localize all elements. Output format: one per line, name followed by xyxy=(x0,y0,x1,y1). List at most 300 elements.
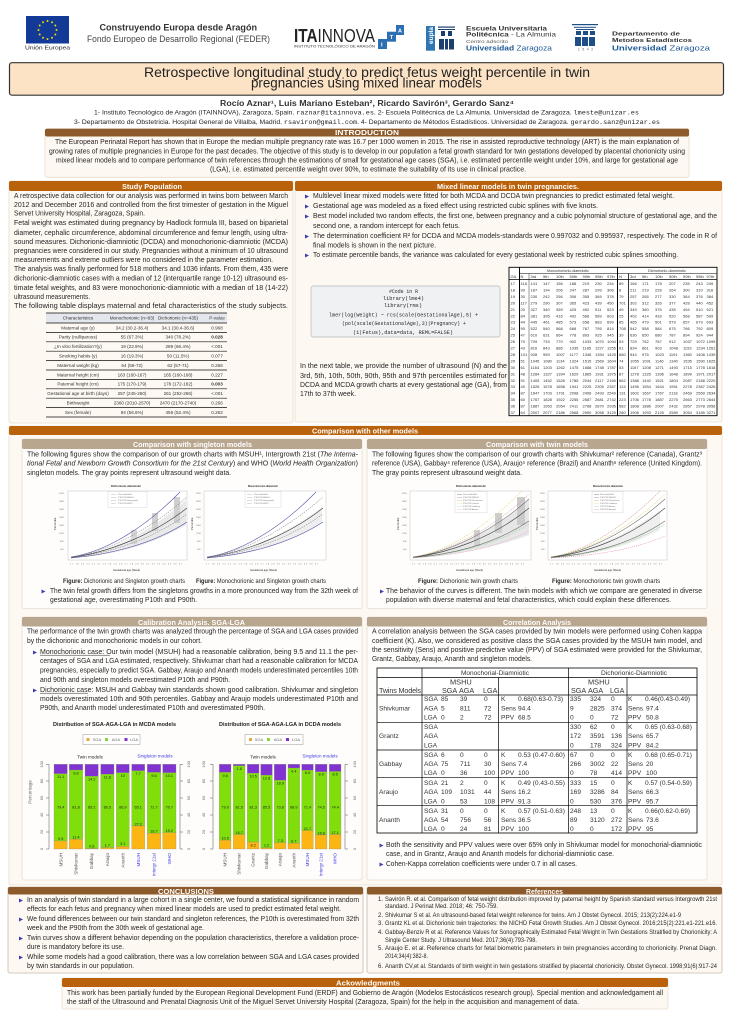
table: maternal and fetal characteristics: Birthweight xyxy=(67,400,90,406)
table: percentiles by gestational age: 24 xyxy=(510,326,516,331)
table: percentiles by gestational age: 26 xyxy=(510,339,516,344)
bar chart: SGA-AGA-LGA in DCDA models: Twin models xyxy=(250,754,276,760)
table: percentiles by gestational age: 1658 xyxy=(556,384,566,389)
table: kappa correlation: 53 xyxy=(460,798,468,806)
table: percentiles by gestational age: 20 xyxy=(520,307,526,312)
table: kappa correlation: 30 xyxy=(484,761,492,768)
table: kappa correlation: LGA xyxy=(424,826,438,833)
bar chart: SGA-AGA-LGA in DCDA models: 8.2 xyxy=(251,844,256,848)
table: percentiles by gestational age: 1791 xyxy=(556,391,566,396)
table: percentiles by gestational age: 279 xyxy=(530,300,538,305)
table: kappa correlation: 0 xyxy=(441,798,445,806)
table: percentiles by gestational age: 792 xyxy=(696,326,703,331)
table: percentiles by gestational age: 39 xyxy=(619,333,624,338)
panel: correlation analysis: the sensitivity (Sens) and positive predictive value (PPV) of SGA estimated were provided for the Shivkumar, xyxy=(372,645,702,654)
bar chart: SGA-AGA-LGA in DCDA models: 0 xyxy=(201,847,206,850)
bar chart: SGA-AGA-LGA in DCDA models: 74.4 xyxy=(332,806,339,810)
bar chart: SGA-AGA-LGA in DCDA models: 10.5 xyxy=(222,836,229,840)
table: percentiles by gestational age: 5th xyxy=(642,274,648,279)
table: percentiles by gestational age: 944 xyxy=(630,352,637,357)
table: percentiles by gestational age: 2168 xyxy=(696,378,706,383)
table: kappa correlation: Sens xyxy=(628,789,644,796)
table: kappa correlation: 100 xyxy=(484,770,495,777)
table: percentiles by gestational age: 650 xyxy=(642,333,649,338)
table: percentiles by gestational age: 510 xyxy=(696,307,703,312)
bar chart: SGA-AGA-LGA in DCDA models: Distribution of SGA-AGA-LGA in DCDA models xyxy=(219,722,341,728)
panel: introduction xyxy=(45,128,689,177)
chart: monochorionic and singleton growth: Monochorionic-diamniotic xyxy=(248,484,278,488)
table: kappa correlation: 0 xyxy=(484,808,488,815)
table: kappa correlation: PPV xyxy=(501,714,515,722)
chart: dichorionic twin growth: P10-P90 Araujo xyxy=(463,508,479,511)
panel: comparison with twin models: The gray points represent ultrasound weight data. xyxy=(372,468,522,477)
table: percentiles by gestational age: 2426 xyxy=(706,384,716,389)
table: kappa correlation: 0 xyxy=(460,752,464,759)
table: percentiles by gestational age: 1388 xyxy=(630,378,640,383)
chart: monochorionic and singleton growth: 400 xyxy=(197,549,201,551)
table: percentiles by gestational age: 166 xyxy=(630,281,637,286)
table: percentiles by gestational age: 2357 xyxy=(607,384,617,389)
chart: monochorionic and singleton growth: 800 xyxy=(197,541,201,543)
table: percentiles by gestational age: 1055 xyxy=(630,358,640,363)
panel: calibration analysis: Monochorionic case: Our twin model (MSUH) had a reasonable calibration, being 9.5 and 11.1 the per- xyxy=(40,647,359,656)
bar chart: SGA-AGA-LGA in MCDA models: Gabbay xyxy=(89,852,94,869)
table: kappa correlation: 0 xyxy=(611,724,615,731)
table: kappa correlation xyxy=(377,668,697,833)
table: percentiles by gestational age: 27 xyxy=(510,346,516,350)
table: percentiles by gestational age: 171 xyxy=(642,281,649,286)
panel: calibration analysis: by the dichorionic and monochorionic models in our cohort. xyxy=(27,636,202,645)
table: percentiles by gestational age: 21 xyxy=(510,307,516,312)
table: percentiles by gestational age: 1818 xyxy=(706,365,716,370)
panel: study population: measurements and extreme outliers were no considered in the parameter estimation. xyxy=(14,255,273,264)
table: percentiles by gestational age: 242 xyxy=(543,294,550,299)
table: percentiles by gestational age: 886 xyxy=(556,346,563,350)
bar chart: SGA-AGA-LGA in DCDA models: 81.3 xyxy=(250,806,257,810)
table: kappa correlation: Sens xyxy=(501,761,517,768)
bar chart: SGA-AGA-LGA in MCDA models: 81.8 xyxy=(72,806,80,810)
table: percentiles by gestational age: 1234 xyxy=(696,346,706,350)
panel: study population: pregnancies were considered in our study. Pregnancies without a minimum of 10 ultrasound xyxy=(14,246,288,255)
table: percentiles by gestational age: 1647 xyxy=(530,391,540,396)
table: percentiles by gestational age: 733 xyxy=(543,339,550,344)
table: percentiles by gestational age: 87 xyxy=(520,391,526,396)
chart: dichorionic and singleton growth: P10-P90 MSUH xyxy=(118,497,134,499)
table: maternal and fetal characteristics: Maternal height (cm) xyxy=(57,372,100,377)
table: percentiles by gestational age: 542 xyxy=(630,326,637,331)
table: percentiles by gestational age: 843 xyxy=(543,346,550,350)
chart: monochorionic twin growth: 3200 xyxy=(540,493,546,495)
table: percentiles by gestational age: 1033 xyxy=(582,339,592,344)
table: kappa correlation: PPV xyxy=(628,826,642,833)
table: maternal and fetal characteristics xyxy=(46,313,227,417)
table: kappa correlation: 109 xyxy=(441,789,452,796)
chart: dichorionic and singleton growth: P10-P90 Intergrowth xyxy=(118,499,139,502)
table: kappa correlation: 0 xyxy=(441,826,445,833)
bar chart: SGA-AGA-LGA in MCDA models: MSUH xyxy=(58,853,64,867)
table: kappa correlation: 44 xyxy=(484,789,492,796)
table: percentiles by gestational age: 310 xyxy=(696,287,703,292)
chart: dichorionic and singleton growth: P10-P90 WHO xyxy=(118,503,133,505)
table: percentiles by gestational age: 445 xyxy=(530,320,538,325)
table: percentiles by gestational age: 32 xyxy=(510,378,516,383)
table: percentiles by gestational age: 2255 xyxy=(570,397,579,402)
table: percentiles by gestational age: 701 xyxy=(619,300,626,305)
bar chart: SGA-AGA-LGA in MCDA models: 71.7 xyxy=(150,806,158,810)
panel: mixed linear models: Gestational age was modeled as a fixed effect using restricted cubic splines with five knots. xyxy=(313,201,598,210)
table: maternal and fetal characteristics: 2360 (2010-2570) xyxy=(114,400,151,406)
panel: comparison with singleton models: singleton models. The gray points represent ultrasound weight data. xyxy=(27,468,231,477)
panel: study population: dichorionic-diamniotic cases with a median of 12 (interquartile range 10-12) ultrasound es- xyxy=(14,274,288,282)
table: kappa correlation: 0.68 (0.65-0.71) xyxy=(645,752,692,759)
table: maternal and fetal characteristics: Smoking habits (y) xyxy=(59,354,97,358)
table: percentiles by gestational age: 147 xyxy=(543,281,550,286)
table: percentiles by gestational age: 53 xyxy=(619,339,624,344)
bullet: twin finding: population with diverse maternal and fetal characteristics, which could explain these differences. xyxy=(386,595,671,604)
table: percentiles by gestational age: 249 xyxy=(706,281,714,286)
bar chart: SGA-AGA-LGA in MCDA models: 20 xyxy=(186,829,191,834)
chart: monochorionic and singleton growth: 3200 xyxy=(196,493,202,495)
table: kappa correlation: 13 xyxy=(590,808,598,815)
heading: FEDER funding xyxy=(87,22,270,44)
table: kappa correlation: 2 xyxy=(460,714,464,722)
table: percentiles by gestational age: 230 xyxy=(595,281,602,286)
table: percentiles by gestational age: 579 xyxy=(669,320,676,325)
table: kappa correlation: Sens xyxy=(628,817,644,824)
table: percentiles by gestational age: 60 xyxy=(520,397,526,402)
logo: EUPLA: eupla xyxy=(428,27,435,44)
table: percentiles by gestational age: 3rd xyxy=(630,274,636,279)
bar chart: SGA-AGA-LGA in DCDA models: 16.7 xyxy=(236,831,243,835)
chart: monochorionic and singleton growth: 17 18 19 20 21 22 23 24 25 26 27 28 29 30 31 32 33 34 35 36 37 xyxy=(206,564,319,566)
table: kappa correlation: 97.4 xyxy=(646,706,659,712)
table: percentiles by gestational age: 3185 xyxy=(696,410,706,415)
table: maternal and fetal characteristics: 0.028 xyxy=(211,335,223,340)
table: percentiles by gestational age: 264 xyxy=(669,287,676,292)
table: percentiles by gestational age: 944 xyxy=(706,333,714,338)
table: percentiles by gestational age: 2087 xyxy=(683,378,693,383)
table: kappa correlation: Shivkumar xyxy=(379,706,411,712)
table: kappa correlation: 16.2 xyxy=(518,789,531,796)
table: percentiles by gestational age: 2432 xyxy=(669,404,679,409)
table: percentiles by gestational age: 679 xyxy=(696,320,703,325)
table: percentiles by gestational age: 256 xyxy=(556,294,563,299)
table: percentiles by gestational age: 1284 xyxy=(530,371,540,376)
bar chart: SGA-AGA-LGA in DCDA models: 73.8 xyxy=(277,806,284,810)
bar chart: SGA-AGA-LGA in MCDA models: 65.1 xyxy=(135,806,142,810)
table: kappa correlation: 81 xyxy=(484,826,492,833)
table: kappa correlation: 169 xyxy=(570,789,581,796)
table: percentiles by gestational age: 1134 xyxy=(556,358,565,363)
chart: monochorionic and singleton growth: 1600 xyxy=(196,525,202,527)
bar chart: SGA-AGA-LGA in DCDA models: Grantz xyxy=(251,852,256,867)
table: percentiles by gestational age: 17 xyxy=(510,281,516,286)
table: percentiles by gestational age: 37 xyxy=(510,410,516,415)
table: percentiles by gestational age: 219 xyxy=(582,281,590,286)
panel: conclusions: While some models had a good calibration, there was a low correlation between SGA and LGA cases provided xyxy=(27,952,359,961)
table: percentiles by gestational age: 36 xyxy=(510,404,516,409)
table: maternal and fetal characteristics: 34.1 (30.4-36.6) xyxy=(162,325,195,330)
logo: Departamento de Métodos Estadísticos: Universidad Zaragoza xyxy=(612,44,711,52)
table: kappa correlation: PPV xyxy=(501,770,515,777)
bar chart: SGA-AGA-LGA in DCDA models: 12.8 xyxy=(263,776,270,780)
table: kappa correlation: Twins Models xyxy=(379,686,421,695)
table: percentiles by gestational age: 1629 xyxy=(570,371,579,376)
logo: Departamento de Métodos Estadísticos: Metodos Estadísticos xyxy=(612,38,692,44)
table: percentiles by gestational age: 1688 xyxy=(582,365,592,370)
table: maternal and fetal characteristics: Parity (nulliparous) xyxy=(59,335,98,340)
table: percentiles by gestational age: 22 xyxy=(510,313,516,318)
table: kappa correlation: LGA xyxy=(424,770,438,777)
table: kappa correlation: 9 xyxy=(570,706,574,712)
bar chart: SGA-AGA-LGA in MCDA models: WHO xyxy=(167,853,172,864)
table: percentiles by gestational age: 43 xyxy=(520,346,526,350)
table: maternal and fetal characteristics: <.001 xyxy=(211,344,223,349)
table: percentiles by gestational age: 1515 xyxy=(582,358,592,363)
authors: Rocío Aznar¹, Luis Mariano Esteban², Ricardo Savirón³, Gerardo Sanz⁴ xyxy=(220,99,514,108)
table: percentiles by gestational age: 90th xyxy=(582,274,590,279)
panel: conclusions: CONCLUSIONS xyxy=(158,887,214,896)
bar chart: SGA-AGA-LGA in DCDA models: 74.5 xyxy=(318,806,325,810)
table: percentiles by gestational age: 1255 xyxy=(607,346,617,350)
table: percentiles by gestational age: 2569 xyxy=(696,391,706,396)
bar chart: SGA-AGA-LGA in DCDA models: 1.2 xyxy=(264,844,269,848)
table: percentiles by gestational age: 312 xyxy=(642,300,649,305)
text: next table description: 17th to 37th week. xyxy=(300,389,356,398)
bar chart: SGA-AGA-LGA in MCDA models: 20 xyxy=(39,829,44,834)
table: maternal and fetal characteristics: 16 (19.3%) xyxy=(121,354,144,358)
table: percentiles by gestational age: 131 xyxy=(619,391,626,396)
bar chart: SGA-AGA-LGA in DCDA models: WHO xyxy=(333,853,338,864)
table: percentiles by gestational age: 376 xyxy=(696,294,703,299)
bar chart: SGA-AGA-LGA in DCDA models: 100 xyxy=(201,760,206,768)
table: percentiles by gestational age: 558 xyxy=(642,326,649,331)
chart: dichorionic twin growth: Percentile xyxy=(396,517,400,530)
logo: ITAINNOVA xyxy=(294,25,404,49)
table: percentiles by gestational age: 49 xyxy=(619,307,624,312)
table: percentiles by gestational age: 2125 xyxy=(655,410,665,415)
table: percentiles by gestational age: 587 xyxy=(696,313,703,318)
chart: dichorionic twin growth: Percentile50th xyxy=(463,493,478,496)
table: percentiles by gestational age: 141 xyxy=(530,281,538,286)
table: percentiles by gestational age: 1648 xyxy=(669,371,679,376)
table: maternal and fetal characteristics: 178 (172-182) xyxy=(164,382,193,387)
table: kappa correlation: 72 xyxy=(484,714,492,722)
table: percentiles by gestational age: 47 xyxy=(520,333,526,338)
bar chart: SGA-AGA-LGA in DCDA models: 8.5 xyxy=(333,772,338,776)
table: percentiles by gestational age: 945 xyxy=(607,333,614,338)
table: percentiles by gestational age: 1604 xyxy=(607,358,617,363)
table: percentiles by gestational age: 228 xyxy=(655,287,662,292)
bar chart: SGA-AGA-LGA in DCDA models: 80 xyxy=(352,778,357,783)
bar chart: SGA-AGA-LGA in MCDA models: 0 xyxy=(186,847,191,850)
table: percentiles by gestational age: 630 xyxy=(630,333,637,338)
table: maternal and fetal characteristics: 55 (67.3%) xyxy=(121,335,144,340)
table: kappa correlation: 50.8 xyxy=(646,714,659,722)
table: percentiles by gestational age: 395 xyxy=(543,313,550,318)
table: kappa correlation: AGA xyxy=(424,706,439,712)
panel: comparison with twin models: reference (USA), Gabbay⁴ reference (USA), Araujo⁵ reference (Brazil) and Ananth⁶ reference (United Kingdom). xyxy=(372,459,702,468)
panel: conclusions: week and the P90th from the 30th week of gestational age. xyxy=(26,923,204,932)
table: percentiles by gestational age: 299 xyxy=(595,287,602,292)
table: percentiles by gestational age: 2275 xyxy=(669,397,679,402)
bar chart: SGA-AGA-LGA in MCDA models: Shivkumar xyxy=(74,853,78,875)
logo: ITAINNOVA: T xyxy=(390,35,394,41)
chart: monochorionic twin growth: 2800 xyxy=(540,501,546,503)
table: percentiles by gestational age: 1804 xyxy=(669,378,679,383)
table: percentiles by gestational age: 97th xyxy=(706,274,714,279)
table: percentiles by gestational age: 25 xyxy=(619,313,624,318)
table: maternal and fetal characteristics: Maternal age (y) xyxy=(61,325,95,330)
table: percentiles by gestational age: 1767 xyxy=(530,397,540,402)
panel: references: standard. J Perinat Med. 2018; 46: 750-759. xyxy=(385,904,498,910)
table: percentiles by gestational age: 3058 xyxy=(595,410,605,415)
table: percentiles by gestational age: 247 xyxy=(570,287,577,292)
table: percentiles by gestational age: 1521 xyxy=(655,378,665,383)
table: maternal and fetal characteristics: P-value xyxy=(209,316,225,320)
table: percentiles by gestational age xyxy=(509,267,717,416)
table: kappa correlation: Sens xyxy=(628,733,644,740)
table: percentiles by gestational age: 1778 xyxy=(642,397,652,402)
table: percentiles by gestational age: 23 xyxy=(510,320,516,325)
logo: ITAINNOVA: A xyxy=(398,28,402,34)
table: maternal and fetal characteristics: 456 (52.4%) xyxy=(165,410,191,415)
table: percentiles by gestational age: 3271 xyxy=(706,410,716,415)
bar chart: SGA-AGA-LGA in MCDA models: 19.2 xyxy=(166,829,173,833)
table: kappa correlation: 0.53 (0.47-0.60) xyxy=(518,752,565,759)
bar chart: SGA-AGA-LGA in DCDA models: 8.9 xyxy=(319,772,324,776)
table: kappa correlation: 172 xyxy=(611,826,622,833)
panel: study population: sound measures. Dichorionic-diamniotic (DCDA) and monochorionic-diamniotic (MCDA) xyxy=(14,237,288,246)
table: percentiles by gestational age: 433 xyxy=(655,313,662,318)
bar chart: SGA-AGA-LGA in MCDA models: AGA xyxy=(112,737,121,742)
table: percentiles by gestational age: 2186 xyxy=(556,410,566,415)
bar chart: SGA-AGA-LGA in MCDA models: Araujo xyxy=(105,853,110,866)
table: percentiles by gestational age: 1048 xyxy=(669,346,679,350)
table: percentiles by gestational age: 523 xyxy=(607,307,614,312)
table: kappa correlation: SGA xyxy=(424,696,439,703)
bar chart: SGA-AGA-LGA in DCDA models: MSUH xyxy=(223,853,228,867)
table: kappa correlation: 22 xyxy=(611,761,619,768)
chart: monochorionic twin growth: Gestational age (Week) xyxy=(594,568,621,572)
table: percentiles by gestational age: 766 xyxy=(683,326,690,331)
panel: introduction: INTRODUCTION xyxy=(335,128,399,137)
table: percentiles by gestational age: 64 xyxy=(520,410,526,415)
table: kappa correlation: 0.66(0.62-0.69) xyxy=(645,808,690,815)
panel: references: 4. xyxy=(378,930,383,936)
table: kappa correlation: 20 xyxy=(646,761,654,768)
table: kappa correlation: 3120 xyxy=(590,817,605,824)
table: percentiles by gestational age: 287 xyxy=(582,287,590,292)
table: percentiles by gestational age: 599 xyxy=(706,313,714,318)
bar chart: SGA-AGA-LGA in DCDA models: 88.9 xyxy=(290,806,297,810)
table: kappa correlation: AGA xyxy=(424,817,439,824)
table: percentiles by gestational age: 492 xyxy=(570,313,577,318)
table: percentiles by gestational age: 355 xyxy=(582,294,590,299)
table: percentiles by gestational age: 603 xyxy=(607,313,614,318)
table: percentiles by gestational age: 582 xyxy=(619,404,626,409)
table: percentiles by gestational age: 1037 xyxy=(683,339,693,344)
table: percentiles by gestational age: 90th xyxy=(683,274,691,279)
chart: dichorionic twin growth: 1600 xyxy=(402,525,408,527)
bar chart: SGA-AGA-LGA in MCDA models: 10 xyxy=(121,774,125,778)
table: percentiles by gestational age: 2220 xyxy=(706,378,716,383)
table: percentiles by gestational age: 87 xyxy=(520,404,526,409)
bar chart: SGA-AGA-LGA in DCDA models: 0 xyxy=(352,847,357,850)
table: percentiles by gestational age: 369 xyxy=(595,294,602,299)
table: percentiles by gestational age: 65 xyxy=(619,320,624,325)
table: percentiles by gestational age: 1931 xyxy=(595,371,605,376)
table: percentiles by gestational age: 277 xyxy=(655,294,662,299)
table: percentiles by gestational age: N xyxy=(619,274,622,279)
table: kappa correlation: LGA xyxy=(424,714,438,722)
table: percentiles by gestational age: 589 xyxy=(595,313,602,318)
chart: dichorionic twin growth: P10-P90 Shivkumar xyxy=(463,499,483,502)
table: percentiles by gestational age: 1271 xyxy=(655,365,665,370)
table: percentiles by gestational age: 234 xyxy=(607,281,614,286)
table: kappa correlation: 68.5 xyxy=(518,714,531,722)
table: kappa correlation: PPV xyxy=(501,798,515,806)
table: percentiles by gestational age: 573 xyxy=(570,320,577,325)
bullet: singleton finding: The twin fetal growth differs from the singletons growths in a more pronounced way from the 32th week of xyxy=(50,586,359,595)
panel: study population: The analysis was finally performed for 518 mothers and 1036 infants. From them, 435 were xyxy=(14,264,288,273)
chart: dichorionic twin growth: 2800 xyxy=(402,501,408,503)
panel: calibration analysis: Calibration Analysis. SGA-LGA xyxy=(138,618,245,627)
table: percentiles by gestational age: 1886 xyxy=(642,404,652,409)
panel: comparison with twin models: Comparison with twin models xyxy=(486,440,588,449)
table: percentiles by gestational age: 664 xyxy=(556,333,563,338)
chart: monochorionic twin growth: P10-P90 MSUH xyxy=(600,497,616,499)
table: percentiles by gestational age: 40 xyxy=(520,384,526,389)
chart: monochorionic and singleton growth: 2800 xyxy=(196,501,202,503)
panel: references: 2. xyxy=(378,913,383,919)
table: percentiles by gestational age: 1493 xyxy=(669,365,679,370)
table: percentiles by gestational age: 95th xyxy=(696,274,704,279)
table: percentiles by gestational age: 1070 xyxy=(595,339,605,344)
table: percentiles by gestational age: 3129 xyxy=(607,410,617,415)
bar chart: SGA-AGA-LGA in MCDA models: MSUH xyxy=(136,853,141,867)
bar chart: SGA-AGA-LGA in DCDA models: 100 xyxy=(352,760,357,768)
chart: monochorionic twin growth: P10-P90 Shivkumar xyxy=(600,499,620,502)
bar chart: SGA-AGA-LGA in MCDA models: LGA xyxy=(130,737,138,742)
bar chart: SGA-AGA-LGA in MCDA models xyxy=(28,722,191,876)
table: percentiles by gestational age: 3056 xyxy=(706,404,716,409)
table: maternal and fetal characteristics: Maternal weight (kg) xyxy=(57,363,99,368)
table: kappa correlation: 78 xyxy=(590,770,598,777)
chart: monochorionic twin growth: Percentile50th xyxy=(600,493,615,496)
bar chart: SGA-AGA-LGA in MCDA models: Ananth xyxy=(120,853,126,868)
bar chart: SGA-AGA-LGA in DCDA models: 40 xyxy=(201,812,206,817)
bar chart: SGA-AGA-LGA in MCDA models: Percentage xyxy=(28,780,32,804)
table: percentiles by gestational age: 101 xyxy=(520,352,528,357)
table: kappa correlation: LGA xyxy=(424,742,438,750)
logo: EUPLA: Universidad Zaragoza xyxy=(466,46,552,53)
table: percentiles by gestational age: 124 xyxy=(619,384,626,389)
table: kappa correlation: 31 xyxy=(441,808,449,815)
chart: monochorionic twin growth: 800 xyxy=(541,541,545,543)
table: kappa correlation: 3002 xyxy=(590,761,605,768)
table: kappa correlation: 414 xyxy=(611,770,622,777)
table: kappa correlation: LGA xyxy=(424,798,438,806)
table: percentiles by gestational age: 265 xyxy=(642,294,649,299)
table: percentiles by gestational age: Monochorionic-diamniotic xyxy=(547,268,589,273)
table: kappa correlation: 2 xyxy=(460,780,464,787)
chart: dichorionic and singleton growth: 17 18 19 20 21 22 23 24 25 26 27 28 29 30 31 32 33 34 35 36 37 xyxy=(70,564,183,566)
table: percentiles by gestational age: N xyxy=(520,274,524,279)
panel: comparison with other models: Comparison with other models xyxy=(312,426,418,436)
text: next table description: DCDA and MCDA growth charts at every gestational age (GA), from xyxy=(300,380,507,389)
bar chart: SGA-AGA-LGA in MCDA models: 79.4 xyxy=(57,806,64,810)
